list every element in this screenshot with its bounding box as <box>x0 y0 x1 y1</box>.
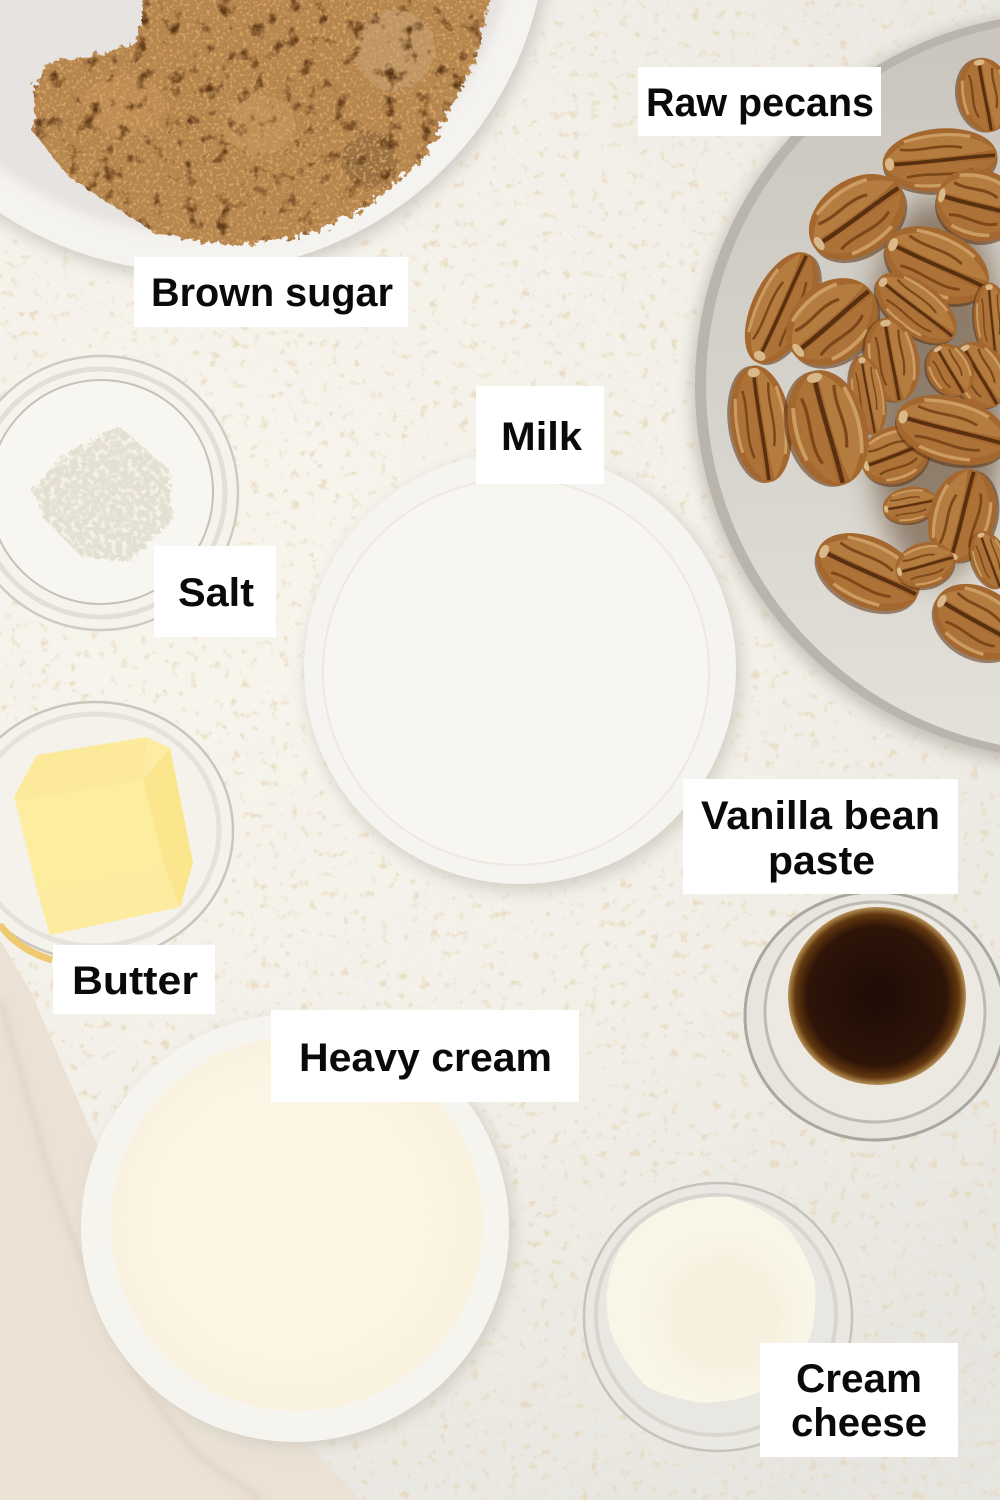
label: Salt: Salt <box>178 571 254 615</box>
pecan halves <box>720 53 1000 679</box>
plate: raw pecans <box>692 12 1000 768</box>
label: Vanilla bean paste <box>683 779 958 894</box>
label: Heavy cream: Heavy cream <box>299 1036 552 1080</box>
butter pat <box>14 737 193 935</box>
label: Vanilla bean paste: paste <box>768 839 875 883</box>
label: Vanilla bean paste: Vanilla bean <box>701 794 940 838</box>
glass bowl: cream cheese <box>584 1183 852 1451</box>
label: Brown sugar <box>134 257 408 327</box>
label: Cream cheese: cheese <box>791 1401 927 1445</box>
label: Raw pecans: Raw pecans <box>646 81 874 125</box>
label: Butter: Butter <box>72 959 198 1003</box>
brown sugar mound <box>34 0 490 247</box>
label: Cream cheese <box>760 1343 958 1457</box>
salt pile <box>32 427 172 562</box>
glass bowl: butter <box>0 702 233 960</box>
bowl: milk <box>304 452 741 891</box>
vanilla paste pool <box>788 907 966 1085</box>
bowl: brown sugar <box>0 0 552 279</box>
label: Brown sugar: Brown sugar <box>151 271 393 315</box>
label: Cream cheese: Cream <box>796 1357 922 1401</box>
label: Heavy cream <box>271 1010 579 1102</box>
label: Milk <box>476 386 604 484</box>
glass bowl: salt <box>0 356 238 630</box>
label: Raw pecans <box>638 67 881 136</box>
label: Milk: Milk <box>501 415 583 459</box>
label: Salt <box>154 546 276 637</box>
label: Butter <box>53 945 215 1014</box>
shadow beneath pecan pile <box>865 200 1000 580</box>
glass bowl: vanilla bean paste <box>745 892 1000 1140</box>
linen napkin <box>0 940 360 1500</box>
bowl: heavy cream <box>81 1014 513 1446</box>
cream cheese dollop <box>607 1197 815 1403</box>
